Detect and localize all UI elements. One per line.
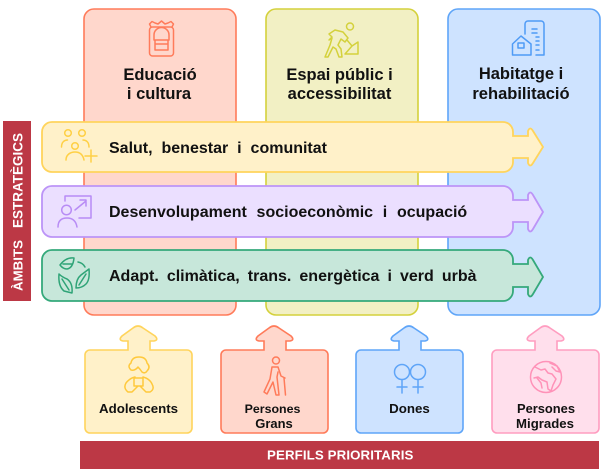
icon: worker digging (325, 23, 358, 57)
icon: recycling leaves (59, 258, 89, 293)
heading: Educació: Educació (123, 66, 197, 84)
icon: elder with cane (264, 357, 286, 395)
icon: globe (530, 362, 562, 392)
sidebar: Àmbits estratègics (3, 121, 31, 301)
label: Dones (389, 401, 430, 416)
icon: teenager with phone (125, 357, 153, 392)
sidebar: Àmbits estratègics: ÀMBITS (10, 240, 26, 291)
icon: community (62, 130, 97, 162)
label (245, 402, 300, 431)
arrow band: Desenvolupament socioeconòmic i ocupació (42, 186, 543, 237)
icon: buildings (512, 21, 544, 55)
label: Adapt. climàtica, trans. energètica i verd urbà (109, 268, 477, 285)
label: Desenvolupament socioeconòmic i ocupació (109, 204, 467, 221)
heading line: i cultura: i cultura (127, 85, 192, 103)
heading: Espai públic i: Espai públic i (286, 66, 393, 84)
arrow band: Adaptació climàtica (42, 250, 543, 301)
label: Grans (255, 416, 293, 431)
label: Persones (245, 402, 300, 416)
label: Adolescents (99, 401, 178, 416)
icon: female symbols (394, 364, 426, 393)
panel: Espai públic i accessibilitat (266, 9, 418, 315)
arrow band: Salut, benestar i comunitat (42, 122, 543, 172)
icon: presentation growth (58, 196, 91, 227)
banner: Perfils prioritaris (80, 441, 599, 469)
heading: Habitatge i: Habitatge i (479, 65, 563, 83)
card: Adolescents (85, 326, 192, 433)
card: Persones Migrades (492, 326, 599, 433)
panel: Educació i cultura (84, 9, 236, 315)
panel: Habitatge i rehabilitació (448, 9, 600, 315)
label: Persones (517, 401, 575, 416)
label: Salut, benestar i comunitat (109, 140, 328, 157)
icon: backpack (150, 21, 174, 56)
card: Persones Grans (221, 326, 328, 433)
label (516, 401, 575, 431)
heading line: rehabilitació: rehabilitació (472, 85, 570, 103)
banner: Perfils prioritaris: PERFILS PRIORITARIS (267, 448, 413, 462)
card: Dones (356, 326, 463, 433)
label: Migrades (516, 416, 574, 431)
sidebar: Àmbits estratègics: ESTRATÈGICS (10, 133, 26, 228)
heading line: accessibilitat: accessibilitat (288, 85, 392, 103)
